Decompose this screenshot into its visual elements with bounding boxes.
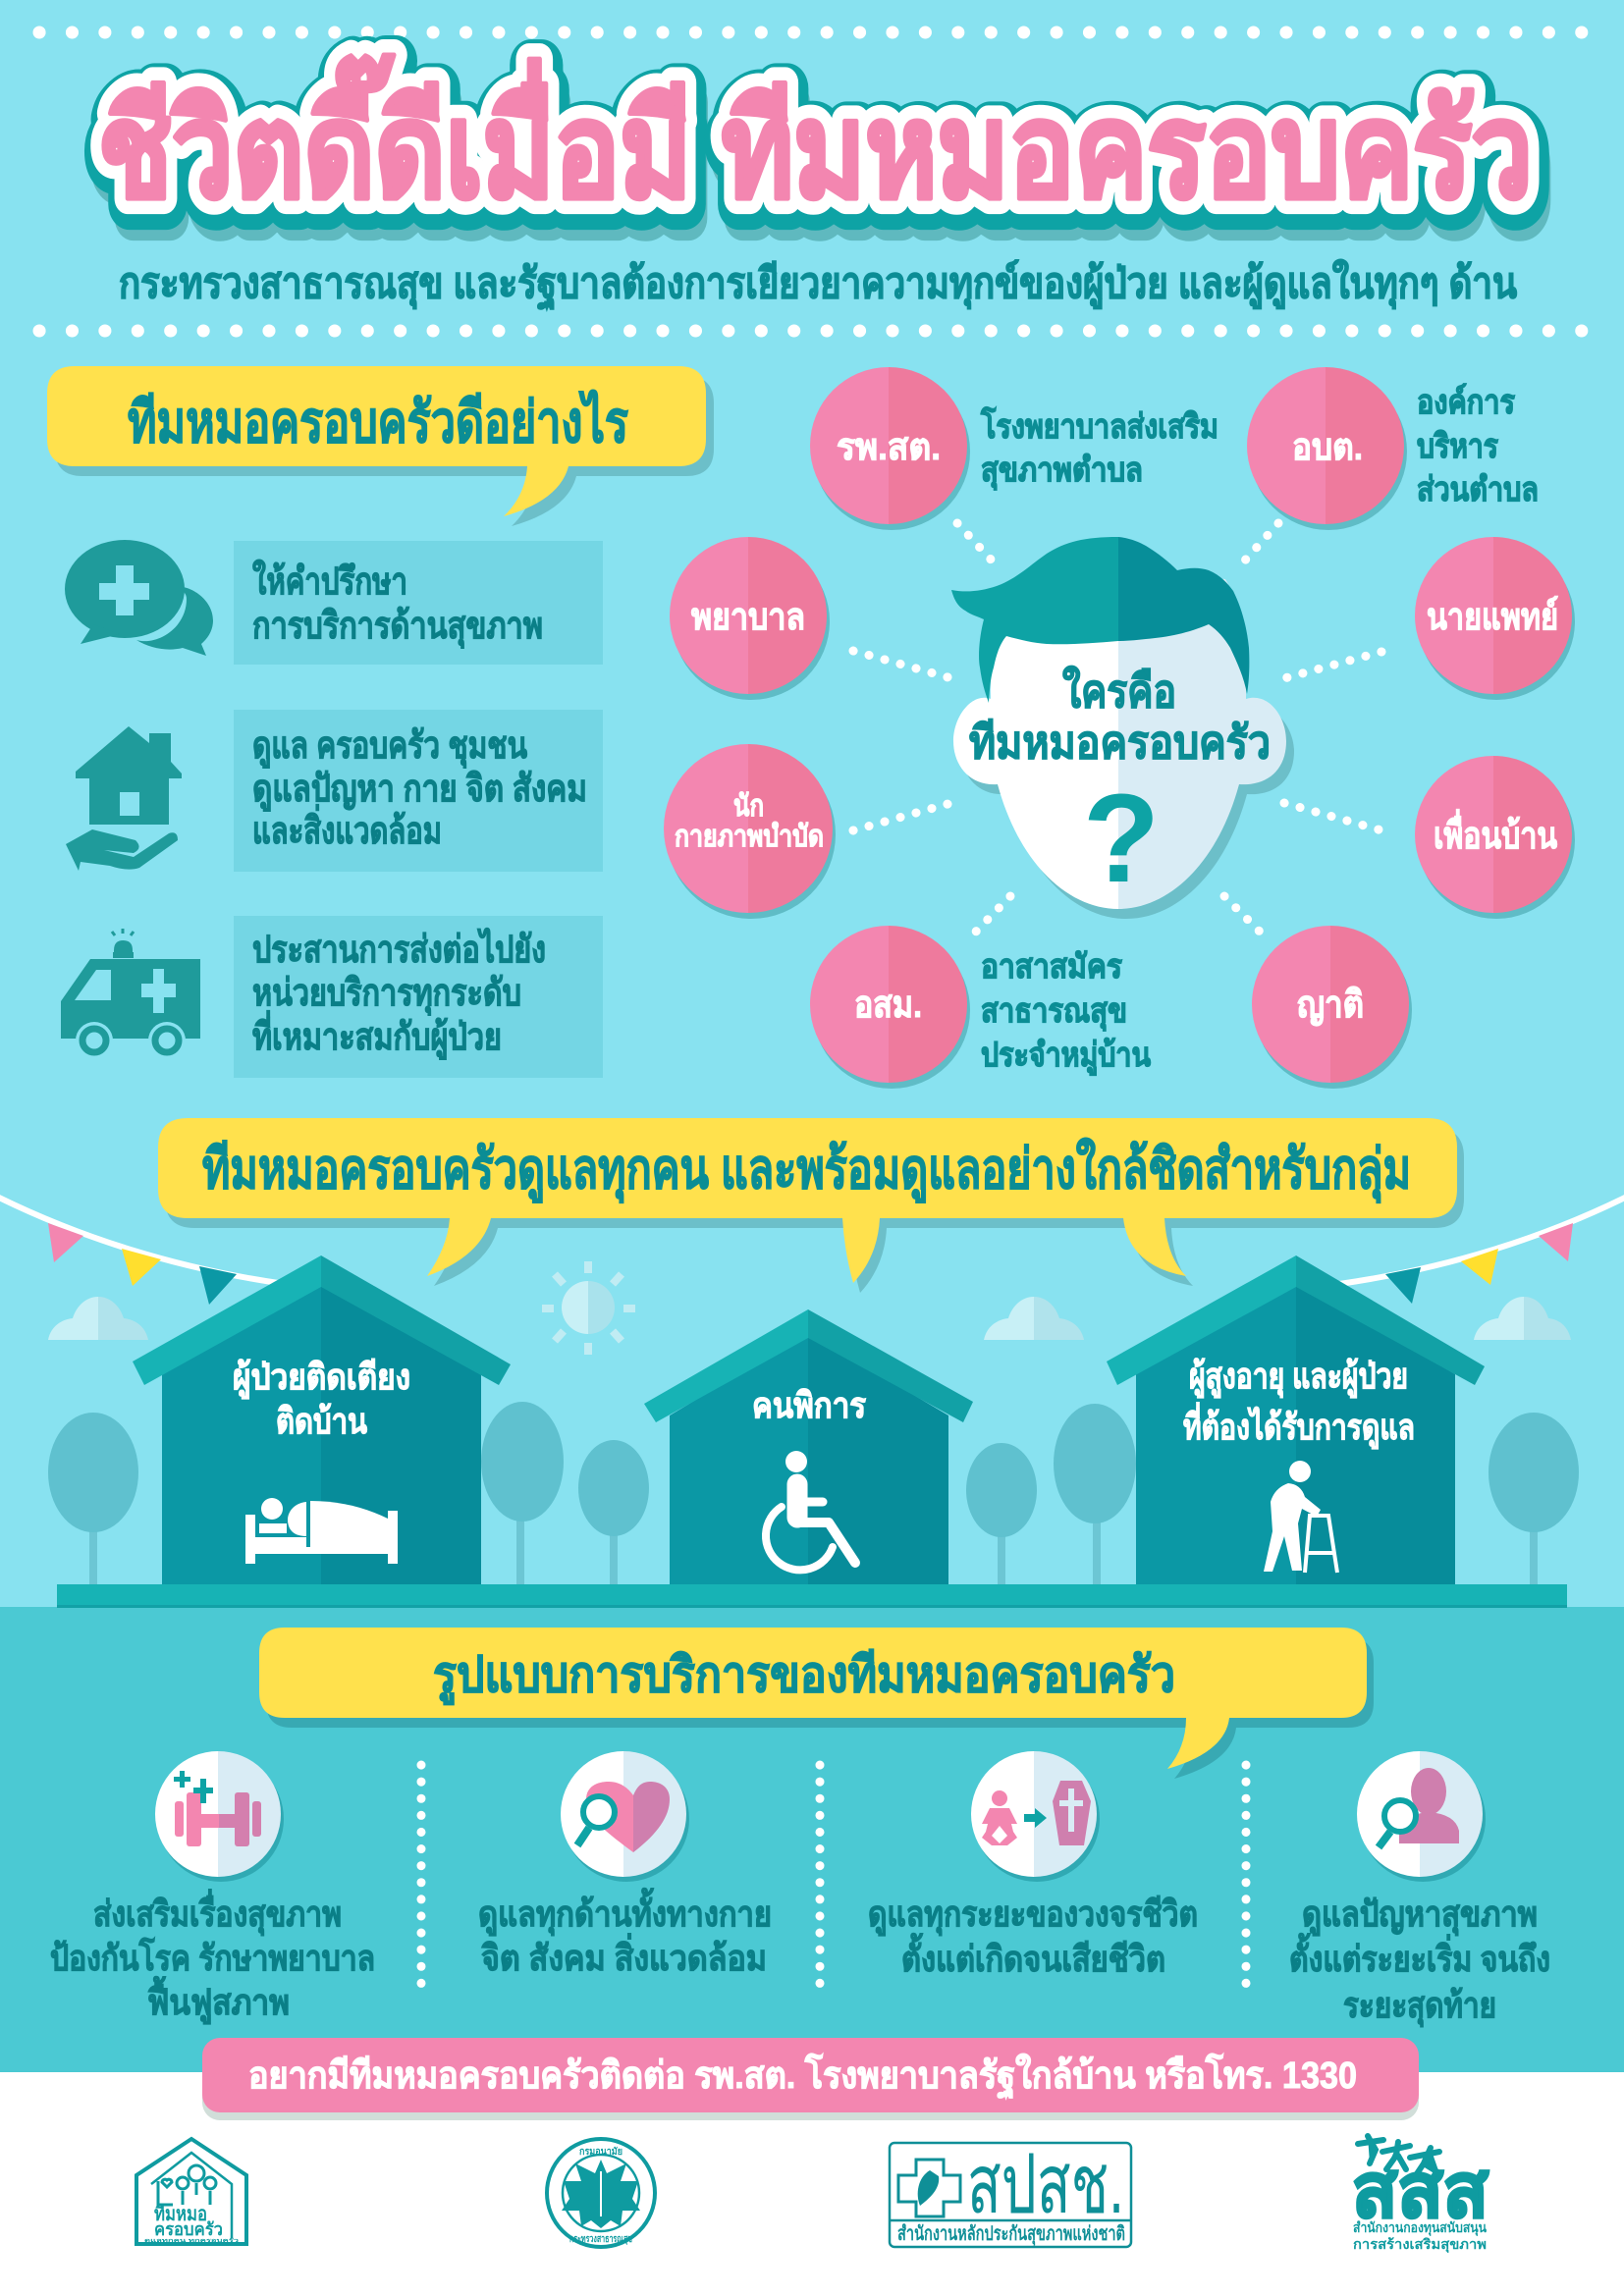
text: staged care [1289, 1894, 1550, 2028]
head shadow [961, 706, 1294, 919]
house: elderly and dependent patients: ผู้สูงอายุ และผู้ป่วย [1189, 1356, 1408, 1399]
logo: ThaiHealth: สสส [1352, 2150, 1489, 2233]
circle: อสม.: อสม. [854, 985, 922, 1026]
label: อบต. full name [1417, 383, 1539, 508]
label: อบต. full name: ส่วนตำบล [1417, 471, 1539, 508]
logo: NHSO: สปสช. [967, 2138, 1124, 2230]
label: อบต. full name: องค์การ [1417, 383, 1516, 421]
service 2: holistic care [478, 1751, 772, 1978]
logo: ministry of public health seal: กรมอนามัย [579, 2146, 623, 2158]
logo: ThaiHealth: สำนักงานกองทุนสนับสนุน [1353, 2219, 1487, 2236]
logo: family doctor team: ครอบครัว [154, 2219, 223, 2239]
text: holistic care: จิต สังคม สิ่งแวดล้อม [481, 1933, 767, 1978]
logo: family doctor team [136, 2139, 246, 2245]
icon: wheelchair [766, 1451, 855, 1570]
text: staged care: ตั้งแต่ระยะเริ่ม จนถึง [1289, 1933, 1550, 1979]
text box: consultation: การบริการด้านสุขภาพ [252, 606, 543, 649]
text: life-cycle care [868, 1894, 1198, 1979]
clouds [48, 1297, 1571, 1340]
house: bedridden patients: ติดบ้าน [276, 1401, 367, 1441]
circle: นักกายภาพบำบัด: กายภาพบำบัด [675, 821, 824, 853]
house: elderly and dependent patients [1107, 1255, 1485, 1584]
scene: bunting left [0, 1196, 285, 1305]
circle: นายแพทย์: นายแพทย์ [1427, 596, 1558, 638]
circle: พยาบาล: พยาบาล [691, 597, 805, 638]
column dividers [421, 1765, 1246, 1997]
circle: ญาติ [1252, 926, 1412, 1089]
text: holistic care [478, 1888, 772, 1978]
panel: who is the family doctor team (head): ทีมหมอครอบครัว [969, 717, 1271, 768]
text: holistic care: ดูแลทุกด้านทั้งทางกาย [478, 1888, 772, 1937]
text box: referral coordination: ประสานการส่งต่อไปยัง [252, 928, 546, 971]
text: life-cycle care: ตั้งแต่เกิดจนเสียชีวิต [901, 1933, 1165, 1979]
circle: เพื่อนบ้าน: เพื่อนบ้าน [1434, 809, 1557, 857]
logo: NHSO [890, 2138, 1131, 2247]
contact banner [202, 2038, 1419, 2120]
icon: heart with magnifier [561, 1751, 689, 1882]
logo: NHSO: สำนักงานหลักประกันสุขภาพแห่งชาติ [897, 2223, 1125, 2246]
text: promotion: ส่งเสริมเรื่องสุขภาพ [93, 1889, 342, 1937]
contact banner: อยากมีทีมหมอครอบครัวติดต่อ รพ.สต. โรงพยาบาลรัฐใกล้บ้าน หรือโทร. 1330 [248, 2053, 1357, 2100]
text box: referral coordination [234, 916, 603, 1078]
label: อสม. full name: สาธารณสุข [981, 992, 1127, 1032]
speech bubble: service models: รูปแบบการบริการของทีมหมอครอบครัว [433, 1647, 1175, 1705]
icon: house on hand [66, 726, 182, 871]
house: disabled people [644, 1309, 973, 1584]
label: รพ.สต. full name [980, 406, 1218, 491]
speech bubble: how is the family doctor team good [47, 366, 714, 526]
panel: benefits list [61, 540, 603, 1078]
label: อสม. full name [981, 948, 1151, 1076]
label: อสม. full name: ประจำหมู่บ้าน [981, 1037, 1151, 1076]
house: bedridden patients: ผู้ป่วยติดเตียง [233, 1357, 410, 1400]
text: life-cycle care: ดูแลทุกระยะของวงจรชีวิต [868, 1894, 1198, 1937]
logo: ThaiHealth: การสร้างเสริมสุขภาพ [1353, 2236, 1487, 2253]
service 3: life-cycle care [868, 1751, 1198, 1979]
circle: อบต.: อบต. [1292, 427, 1363, 468]
circle: นักกายภาพบำบัด: นัก [733, 790, 764, 823]
text box: referral coordination: หน่วยบริการทุกระดับ [252, 973, 521, 1016]
circle: นายแพทย์ [1415, 537, 1575, 700]
speech bubble: service models [259, 1628, 1374, 1779]
scene: bunting right [1339, 1196, 1624, 1304]
text box: consultation [234, 541, 603, 665]
icon: consultation chat bubbles [65, 540, 213, 656]
text box: referral coordination: ที่เหมาะสมกับผู้ป่วย [252, 1010, 502, 1060]
circle: รพ.สต.: รพ.สต. [837, 427, 941, 468]
text box: family and community care [234, 710, 603, 872]
service 1: promotion and prevention [50, 1751, 375, 2025]
logo: family doctor team: ทีมหมอ [154, 2203, 207, 2225]
circle: ญาติ: ญาติ [1297, 985, 1364, 1026]
label: อสม. full name: อาสาสมัคร [981, 948, 1123, 986]
icon: sun [542, 1261, 635, 1355]
text: staged care: ดูแลปัญหาสุขภาพ [1302, 1894, 1538, 1937]
trees [48, 1402, 1579, 1586]
speech bubble: cares for everyone [158, 1118, 1464, 1293]
dotted connectors [853, 523, 1381, 934]
logo: ministry of public health seal: กระทรวงสาธารณสุข [569, 2234, 632, 2245]
icon: ambulance [61, 929, 200, 1059]
label: รพ.สต. full name: โรงพยาบาลส่งเสริม [980, 406, 1218, 446]
text: staged care: ระยะสุดท้าย [1343, 1985, 1496, 2028]
house: disabled people: คนพิการ [752, 1385, 867, 1425]
face [953, 569, 1118, 909]
circle: นักกายภาพบำบัด [664, 744, 836, 919]
circle: พยาบาล [670, 537, 830, 700]
text: promotion [50, 1889, 375, 2025]
panel: who is the family doctor team (head) [951, 537, 1294, 919]
hair [951, 537, 1118, 703]
circle: อสม. [810, 926, 970, 1089]
label: รพ.สต. full name: สุขภาพตำบล [981, 452, 1143, 491]
text: promotion: ฟื้นฟูสภาพ [147, 1976, 290, 2025]
speech bubble: how is the family doctor team good: ทีมหมอครอบครัวดีอย่างไร [128, 390, 628, 454]
logo: family doctor team: ดูแลทุกคน ทุกครอบครัว [144, 2237, 239, 2245]
text: promotion: ป้องกันโรค รักษาพยาบาล [50, 1937, 375, 1978]
icon: baby arrow coffin [971, 1751, 1100, 1882]
text box: consultation: ให้คำปรึกษา [252, 560, 407, 603]
ground bar [57, 1584, 1567, 1608]
text box: family and community care: และสิ่งแวดล้อม [252, 804, 442, 852]
text box: family and community care: ดูแลปัญหา กาย จิต สังคม [252, 769, 587, 812]
question mark: ? [1083, 769, 1160, 909]
circle: รพ.สต. [810, 367, 970, 530]
icon: bed [245, 1498, 398, 1564]
text box: family and community care: ดูแล ครอบครัว ชุมชน [252, 725, 527, 769]
house: bedridden patients [133, 1255, 511, 1584]
circle: อบต. [1247, 367, 1407, 530]
service 4: early to end-stage care [1289, 1751, 1550, 2028]
icon: elderly person with walker [1264, 1461, 1337, 1573]
label: อบต. full name: บริหาร [1417, 428, 1499, 465]
icon: dumbbell in circle [155, 1751, 284, 1882]
circle: เพื่อนบ้าน [1415, 756, 1575, 919]
icon: person with magnifier [1357, 1751, 1486, 1882]
house: elderly and dependent patients: ที่ต้องได้รับการดูแล [1183, 1402, 1415, 1450]
who text: ใครคือ [1062, 665, 1176, 717]
logo: ministry of public health seal [547, 2139, 655, 2247]
